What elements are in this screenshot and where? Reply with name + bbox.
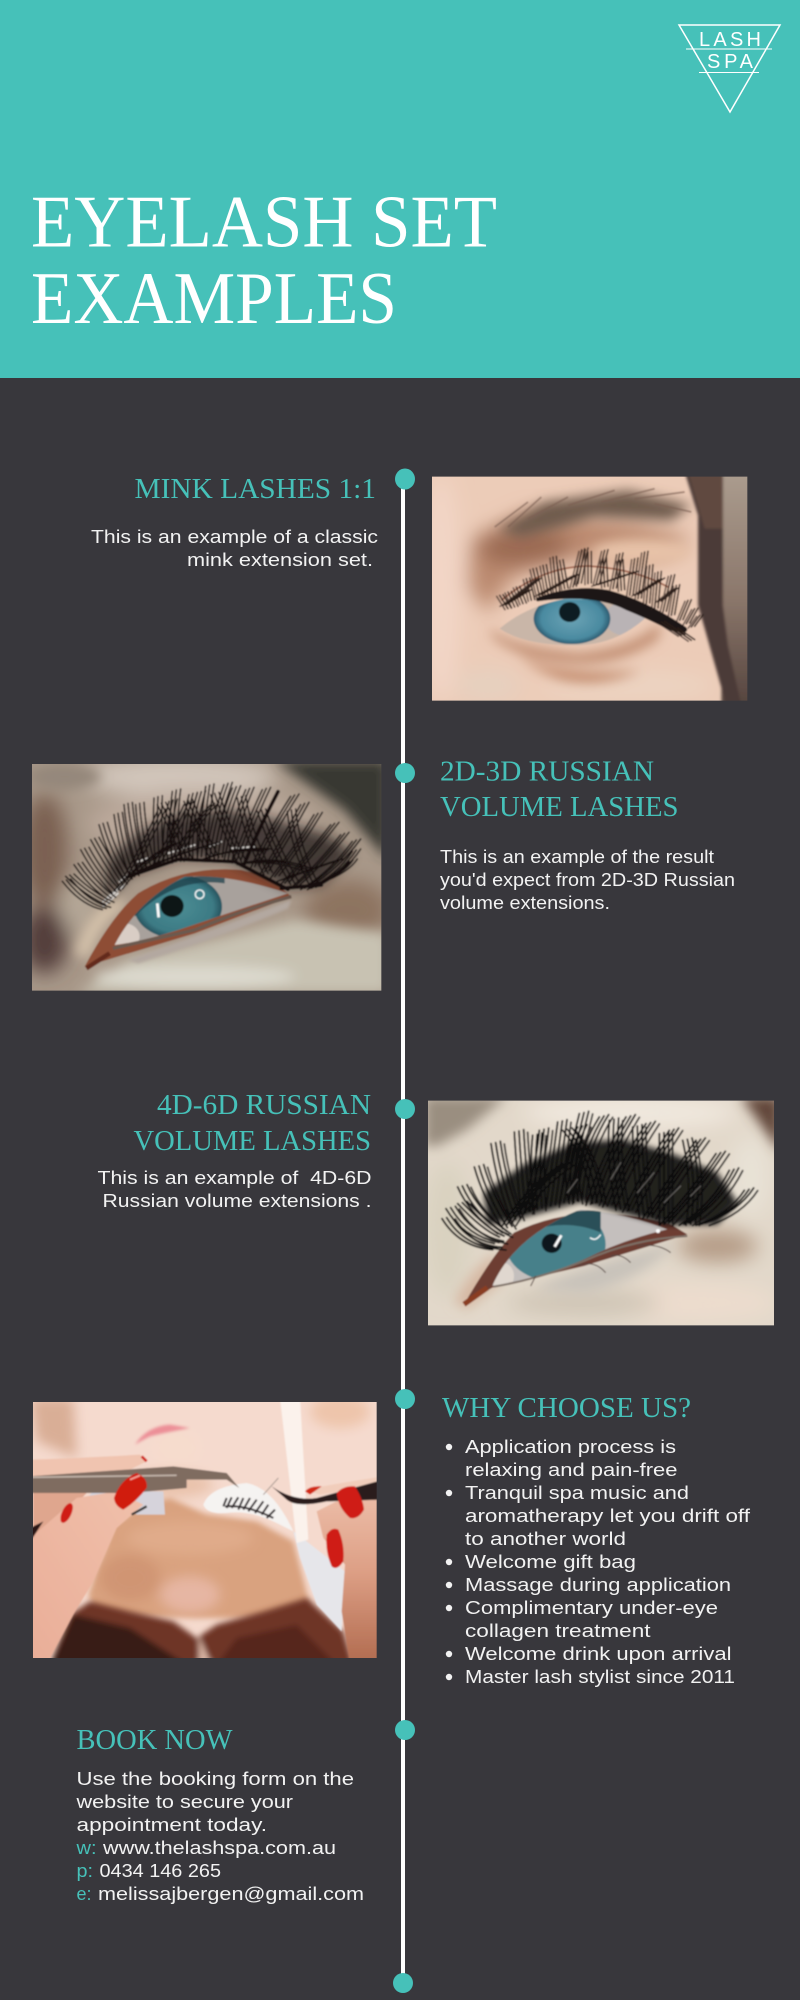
photo: lash application <box>33 1402 377 1658</box>
eye <box>546 569 573 576</box>
section: 2D-3D text: volume extensions. <box>440 893 610 913</box>
section: 4D-6D text: This is an example of 4D-6D <box>98 1168 372 1188</box>
lips <box>135 1425 190 1445</box>
contact details: w: <box>75 1838 96 1858</box>
section: mink lashes text: MINK LASHES 1:1 <box>134 473 376 505</box>
right tweezers <box>272 1480 383 1504</box>
section: 2D-3D text <box>440 756 735 913</box>
bullet list: Master lash stylist since 2011 <box>465 1667 735 1687</box>
lashes <box>497 548 703 641</box>
section: mink lashes text: This is an example of a classic <box>91 527 378 547</box>
logo: Lash Spa triangle <box>679 25 780 112</box>
section: 2D-3D text: This is an example of the result <box>440 847 714 867</box>
logo: Lash Spa triangle: SPA <box>707 51 754 73</box>
logo: Lash Spa triangle: LASH <box>699 29 761 51</box>
brow hairs <box>495 489 691 527</box>
section: why choose us <box>442 1392 751 1687</box>
bullet list: to another world <box>465 1529 626 1549</box>
bullet list: Massage during application <box>465 1575 731 1595</box>
contact details: e: <box>76 1884 92 1904</box>
section: why choose us: WHY CHOOSE US? <box>442 1392 691 1424</box>
section: book now: appointment today. <box>76 1815 267 1835</box>
title <box>31 182 497 340</box>
bullet list: Application process is <box>465 1437 676 1457</box>
bullet list: relaxing and pain-free <box>465 1460 678 1480</box>
header banner <box>0 0 800 378</box>
section: 4D-6D text: 4D-6D RUSSIAN <box>157 1089 371 1121</box>
right hand <box>314 1478 377 1658</box>
contact details: www.thelashspa.com.au <box>102 1838 336 1858</box>
right red nails <box>337 1486 364 1518</box>
contact details: 0434 146 265 <box>100 1861 221 1881</box>
contact details: p: <box>76 1861 93 1881</box>
eye <box>85 869 291 967</box>
timeline <box>393 468 415 1993</box>
section: 4D-6D text: Russian volume extensions . <box>102 1191 372 1211</box>
section: book now: website to secure your <box>75 1792 293 1812</box>
section: mink lashes text <box>91 473 378 570</box>
bullet list: Welcome drink upon arrival <box>465 1644 732 1664</box>
hair <box>50 1598 353 1665</box>
section: 2D-3D text: VOLUME LASHES <box>440 791 678 823</box>
bullet list: collagen treatment <box>465 1621 650 1641</box>
section: book now: Use the booking form on the <box>76 1769 354 1789</box>
contact details: melissajbergen@gmail.com <box>98 1884 364 1904</box>
bullet list: Tranquil spa music and <box>465 1483 689 1503</box>
photo: mink lash eye <box>432 476 748 701</box>
under-eye pad <box>203 1483 293 1531</box>
photo: 4D-6D eye <box>428 1100 774 1326</box>
bullet list: aromatherapy let you drift off <box>465 1506 751 1526</box>
bullet list: Welcome gift bag <box>465 1552 636 1572</box>
section: book now: BOOK NOW <box>76 1724 233 1756</box>
left tweezers <box>30 1466 239 1493</box>
title: EYELASH SET <box>31 182 497 264</box>
section: 2D-3D text: you'd expect from 2D-3D Russian <box>440 870 735 890</box>
contact details <box>75 1838 364 1904</box>
section: mink lashes text: mink extension set. <box>187 550 373 570</box>
title: EXAMPLES <box>31 258 397 340</box>
eye <box>464 1214 687 1304</box>
section: 4D-6D text: VOLUME LASHES <box>134 1125 371 1157</box>
left hand <box>27 1455 147 1665</box>
section: 2D-3D text: 2D-3D RUSSIAN <box>440 756 654 788</box>
lashes <box>484 1139 737 1225</box>
forehead <box>88 1498 310 1618</box>
timeline dots <box>393 468 415 1993</box>
left pad <box>77 1491 165 1515</box>
bullet list <box>446 1437 751 1687</box>
section: book now <box>75 1724 364 1904</box>
hair strand <box>684 476 748 701</box>
lashes <box>105 810 353 903</box>
section: 4D-6D text <box>98 1089 372 1211</box>
left red nail <box>114 1473 147 1510</box>
lash strip <box>223 1497 275 1518</box>
bullet list: Complimentary under-eye <box>465 1598 718 1618</box>
photo: 2D-3D eye <box>32 764 382 991</box>
